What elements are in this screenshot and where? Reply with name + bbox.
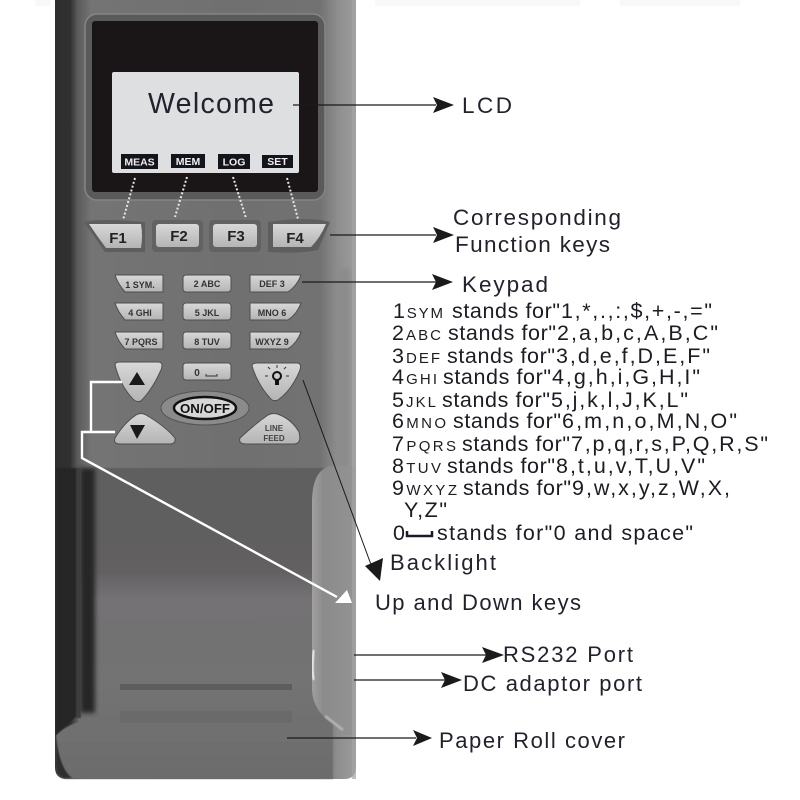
keypad bbox=[115, 275, 301, 444]
keypad legend: stands for" bbox=[442, 388, 550, 412]
key 8 bbox=[183, 332, 231, 349]
right side strip bbox=[336, 268, 350, 468]
LCD screen bbox=[112, 72, 299, 173]
keypad legend bbox=[392, 299, 768, 545]
dotted connectors to function keys bbox=[123, 177, 298, 220]
arrow: paper roll cover bbox=[287, 730, 432, 746]
key: F4: F4 bbox=[286, 230, 304, 247]
LCD bezel bbox=[85, 14, 325, 200]
arrow: keypad bbox=[302, 274, 453, 290]
key: backlight bbox=[252, 363, 301, 401]
key 0: 0 bbox=[194, 368, 200, 379]
keypad legend: 9WXYZ bbox=[392, 476, 457, 500]
arrow: function keys bbox=[330, 227, 454, 243]
keypad legend: 2,a,b,c,A,B,C" bbox=[557, 321, 718, 345]
keypad legend: stands for" bbox=[448, 321, 556, 345]
arrow: RS232 port bbox=[354, 647, 504, 663]
label: DC adaptor port: DC adaptor port bbox=[463, 671, 642, 696]
label: LCD: LCD bbox=[462, 93, 512, 118]
key: on/off bbox=[161, 391, 249, 425]
keypad legend: 1SYM bbox=[393, 299, 443, 323]
soft label: SET: SET bbox=[267, 156, 288, 168]
keypad legend: Y,Z" bbox=[404, 498, 447, 522]
key 4: 4 GHI bbox=[128, 308, 152, 318]
arrow: LCD bbox=[293, 97, 454, 113]
key 9 bbox=[250, 332, 301, 349]
soft label: MEAS bbox=[121, 154, 158, 169]
keypad legend: 4,g,h,i,G,H,I" bbox=[552, 365, 700, 389]
keypad legend: 6,m,n,o,M,N,O" bbox=[562, 409, 737, 433]
key 7: 7 PQRS bbox=[124, 337, 158, 347]
key: F2: F2 bbox=[170, 228, 188, 245]
soft label: LOG: LOG bbox=[223, 156, 245, 168]
arrow: backlight bbox=[303, 380, 383, 581]
keypad legend: 7PQRS bbox=[392, 432, 456, 456]
key: F3: F3 bbox=[227, 228, 245, 245]
soft label: LOG bbox=[218, 154, 250, 169]
label: RS232 port: RS232 Port bbox=[503, 642, 633, 667]
key 5 bbox=[183, 303, 231, 320]
keypad legend: stands for" bbox=[452, 299, 560, 323]
key: line feed bbox=[240, 414, 300, 444]
key 7 bbox=[115, 332, 163, 349]
keypad legend: 5JKL bbox=[392, 388, 436, 412]
label: corresponding function keys: Corresponding bbox=[453, 205, 621, 230]
keypad legend: 9,w,x,y,z,W,X, bbox=[572, 476, 730, 500]
keypad legend: 4GHI bbox=[392, 365, 437, 389]
keypad legend: stands for" bbox=[453, 409, 561, 433]
lower body panel: paper roll cover bbox=[56, 468, 333, 779]
soft label: MEM bbox=[171, 154, 205, 168]
key 1 bbox=[115, 275, 163, 292]
function keys bbox=[84, 219, 330, 253]
key: F1: F1 bbox=[109, 230, 127, 247]
keypad legend: 2ABC bbox=[392, 321, 441, 345]
keypad legend: 5,j,k,l,J,K,L" bbox=[551, 388, 688, 412]
device body bbox=[55, 0, 356, 779]
faint top text remnants bbox=[35, 0, 740, 6]
label: corresponding function keys: Function keys bbox=[455, 232, 610, 257]
key 6: MNO 6 bbox=[258, 308, 286, 318]
key: F1 bbox=[89, 224, 142, 248]
keypad legend: 8TUV bbox=[392, 454, 441, 478]
keypad legend: 8,t,u,v,T,U,V" bbox=[556, 454, 705, 478]
key: on/off: ON/OFF bbox=[180, 402, 230, 416]
keypad legend: 1,*,.,:,$,+,-,=" bbox=[561, 299, 712, 323]
keypad legend: 3,d,e,f,D,E,F" bbox=[556, 344, 710, 368]
keypad legend: 7,p,q,r,s,P,Q,R,S" bbox=[571, 432, 768, 456]
keypad legend: stands for" bbox=[443, 365, 551, 389]
keypad legend: stands for" bbox=[447, 454, 555, 478]
key 1: 1 SYM. bbox=[125, 280, 155, 290]
key 2 bbox=[183, 275, 231, 292]
keypad legend: 6MNO bbox=[392, 409, 446, 433]
paper slots bbox=[120, 684, 292, 723]
key: up bbox=[115, 362, 162, 402]
key: F2 bbox=[156, 224, 199, 247]
key 8: 8 TUV bbox=[194, 337, 220, 347]
keypad legend: 3DEF bbox=[392, 344, 440, 368]
key 3: DEF 3 bbox=[259, 279, 285, 289]
soft label: MEAS: MEAS bbox=[124, 156, 155, 168]
keypad legend: stands for" bbox=[463, 476, 571, 500]
keypad legend: 0 bbox=[393, 521, 405, 545]
key: F3 bbox=[213, 224, 257, 247]
welcome text: Welcome bbox=[148, 88, 274, 120]
key 5: 5 JKL bbox=[195, 308, 220, 318]
label: keypad: Keypad bbox=[462, 272, 548, 297]
keypad legend: stands for" bbox=[462, 432, 570, 456]
soft label: MEM: MEM bbox=[176, 156, 200, 168]
keypad legend: stands for" bbox=[447, 344, 555, 368]
key 6 bbox=[250, 303, 301, 320]
key: F4 bbox=[273, 224, 326, 247]
keypad legend: stands for"0 and space" bbox=[437, 521, 693, 545]
key 9: WXYZ 9 bbox=[255, 337, 289, 347]
label: up and down keys: Up and Down keys bbox=[375, 590, 581, 615]
arrow: DC adaptor port bbox=[354, 672, 462, 688]
soft label: SET bbox=[262, 155, 293, 168]
key: line feed: FEED bbox=[263, 434, 285, 443]
arrow: up and down keys bbox=[82, 382, 352, 603]
key: line feed: LINE bbox=[265, 424, 284, 433]
label: backlight: Backlight bbox=[390, 550, 496, 575]
key 3 bbox=[250, 275, 301, 292]
label: paper roll cover: Paper Roll cover bbox=[439, 728, 625, 753]
key: down bbox=[115, 414, 175, 444]
key 4 bbox=[115, 303, 163, 320]
label: corresponding function keys bbox=[453, 205, 621, 257]
key 0 bbox=[183, 363, 231, 380]
key 2: 2 ABC bbox=[194, 279, 221, 289]
